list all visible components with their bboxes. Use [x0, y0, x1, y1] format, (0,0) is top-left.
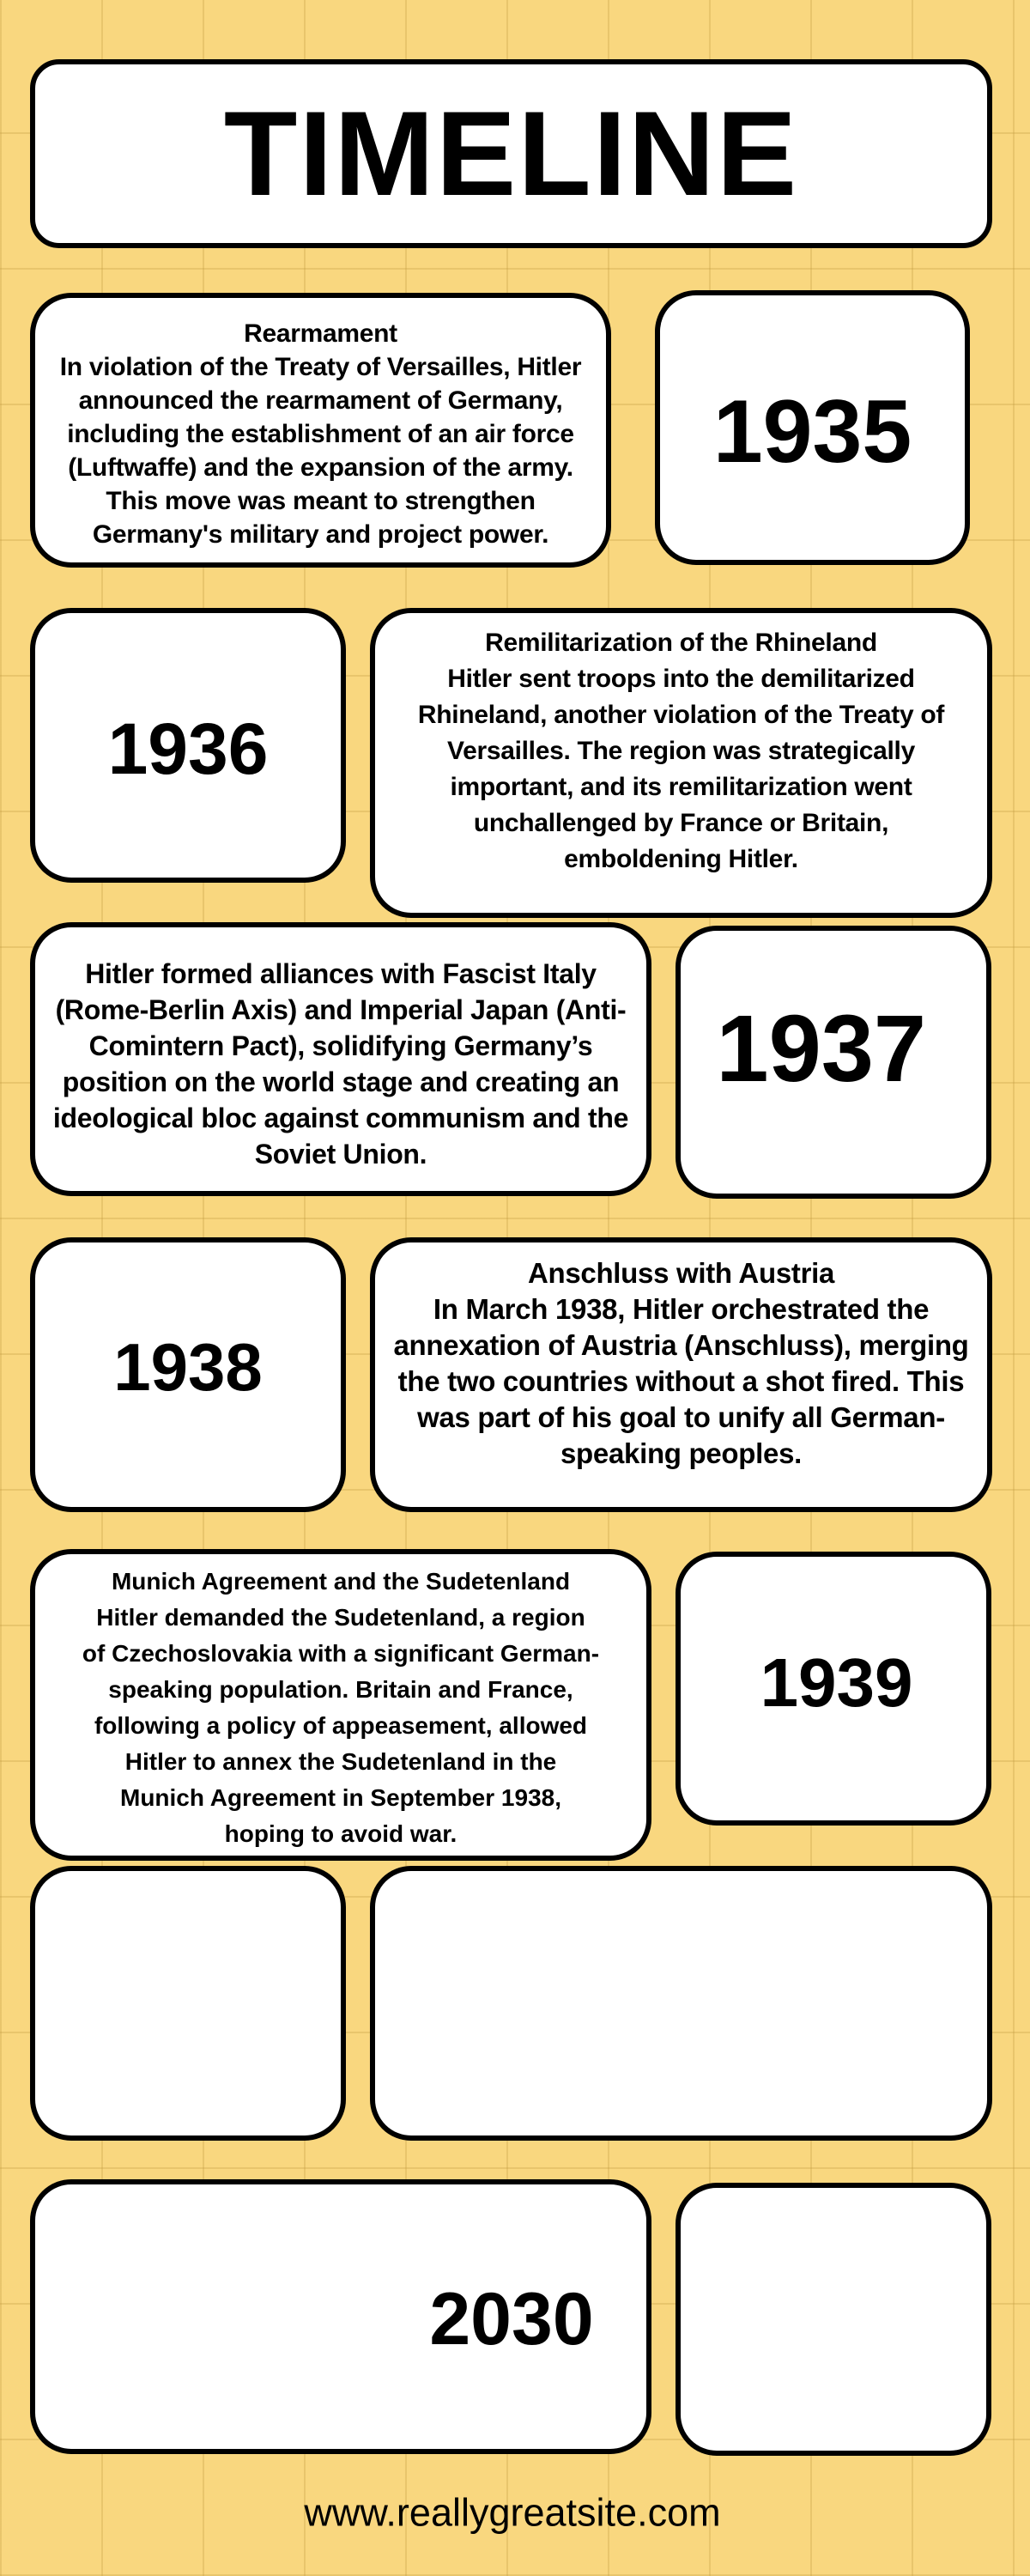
text: rhineland: Hitler sent troops into the demilitarized [447, 665, 915, 693]
text: anschluss [393, 1257, 969, 1469]
text: munich: speaking population. Britain and France, [108, 1676, 573, 1703]
text: anschluss: Anschluss with Austria [528, 1257, 834, 1289]
panel: rhineland text [370, 608, 992, 918]
text: rhineland: emboldening Hitler. [564, 845, 798, 873]
text: anschluss: was part of his goal to unify all German- [417, 1401, 945, 1433]
panel: 1936 [30, 608, 346, 883]
panel: empty small [676, 2183, 991, 2456]
text: munich: of Czechoslovakia with a significant German- [82, 1640, 599, 1667]
text: anschluss: the two countries without a shot fired. This [398, 1365, 964, 1397]
text: munich: Hitler demanded the Sudetenland, a region [96, 1604, 585, 1631]
text: alliances: Comintern Pact), solidifying Germany’s [89, 1030, 592, 1061]
panel: alliances text [30, 922, 651, 1196]
text: rearmament [60, 319, 582, 549]
text: alliances: position on the world stage and creating an [63, 1066, 619, 1097]
text: munich: Munich Agreement and the Sudetenland [112, 1568, 570, 1595]
text: rhineland: unchallenged by France or Britain, [474, 809, 888, 837]
panel: empty right [370, 1866, 992, 2141]
panel: empty left [30, 1866, 346, 2141]
text: rhineland [418, 629, 944, 873]
panel: 1935 [655, 290, 970, 565]
text: anschluss: In March 1938, Hitler orchestrated the [433, 1293, 929, 1325]
text: rearmament: In violation of the Treaty of Versailles, Hitler [60, 353, 581, 381]
text: rhineland: important, and its remilitarization went [450, 773, 912, 801]
text: munich [82, 1568, 599, 1847]
year 1939: 1939 [760, 1644, 913, 1721]
title text: TIMELINE [224, 86, 798, 221]
text: rhineland: Remilitarization of the Rhineland [485, 629, 877, 657]
text: munich: Munich Agreement in September 1938, [120, 1784, 561, 1811]
panel: rearmament text [30, 293, 611, 568]
panel: 2030 [30, 2179, 651, 2454]
text: rhineland: Rhineland, another violation of the Treaty of [418, 701, 944, 729]
year 1938: 1938 [113, 1329, 263, 1405]
year 1936: 1936 [108, 708, 268, 789]
year 2030: 2030 [429, 2278, 594, 2360]
text: rearmament: announced the rearmament of Germany, [79, 386, 562, 415]
panel: anschluss text [370, 1237, 992, 1512]
year 1937: 1937 [716, 996, 926, 1102]
footer url: www.reallygreatsite.com [304, 2490, 721, 2535]
text: rearmament: Rearmament [244, 319, 397, 348]
panel: 1937 [676, 926, 991, 1199]
text: alliances: (Rome-Berlin Axis) and Imperial Japan (Anti- [56, 994, 626, 1025]
title [30, 59, 992, 248]
year 1935: 1935 [713, 382, 912, 482]
text: munich: hoping to avoid war. [225, 1820, 457, 1847]
panel: 1939 [676, 1552, 991, 1826]
panel: 1938 [30, 1237, 346, 1512]
text: anschluss: annexation of Austria (Anschluss), merging [393, 1329, 969, 1361]
text: rearmament: This move was meant to strengthen [106, 487, 536, 515]
text: rearmament: Germany's military and project power. [93, 520, 548, 549]
text: rearmament: including the establishment of an air force [67, 420, 574, 448]
text: rhineland: Versailles. The region was strategically [447, 737, 915, 765]
text: alliances: Soviet Union. [255, 1139, 427, 1170]
text: alliances: ideological bloc against communism and the [53, 1103, 628, 1133]
panel: munich text [30, 1549, 651, 1861]
text: alliances: Hitler formed alliances with Fascist Italy [85, 958, 597, 989]
text: alliances [53, 958, 628, 1170]
text: munich: Hitler to annex the Sudetenland in the [125, 1748, 556, 1775]
text: anschluss: speaking peoples. [560, 1437, 802, 1469]
text: munich: following a policy of appeasement, allowed [94, 1712, 587, 1739]
text: rearmament: (Luftwaffe) and the expansion of the army. [68, 453, 573, 482]
